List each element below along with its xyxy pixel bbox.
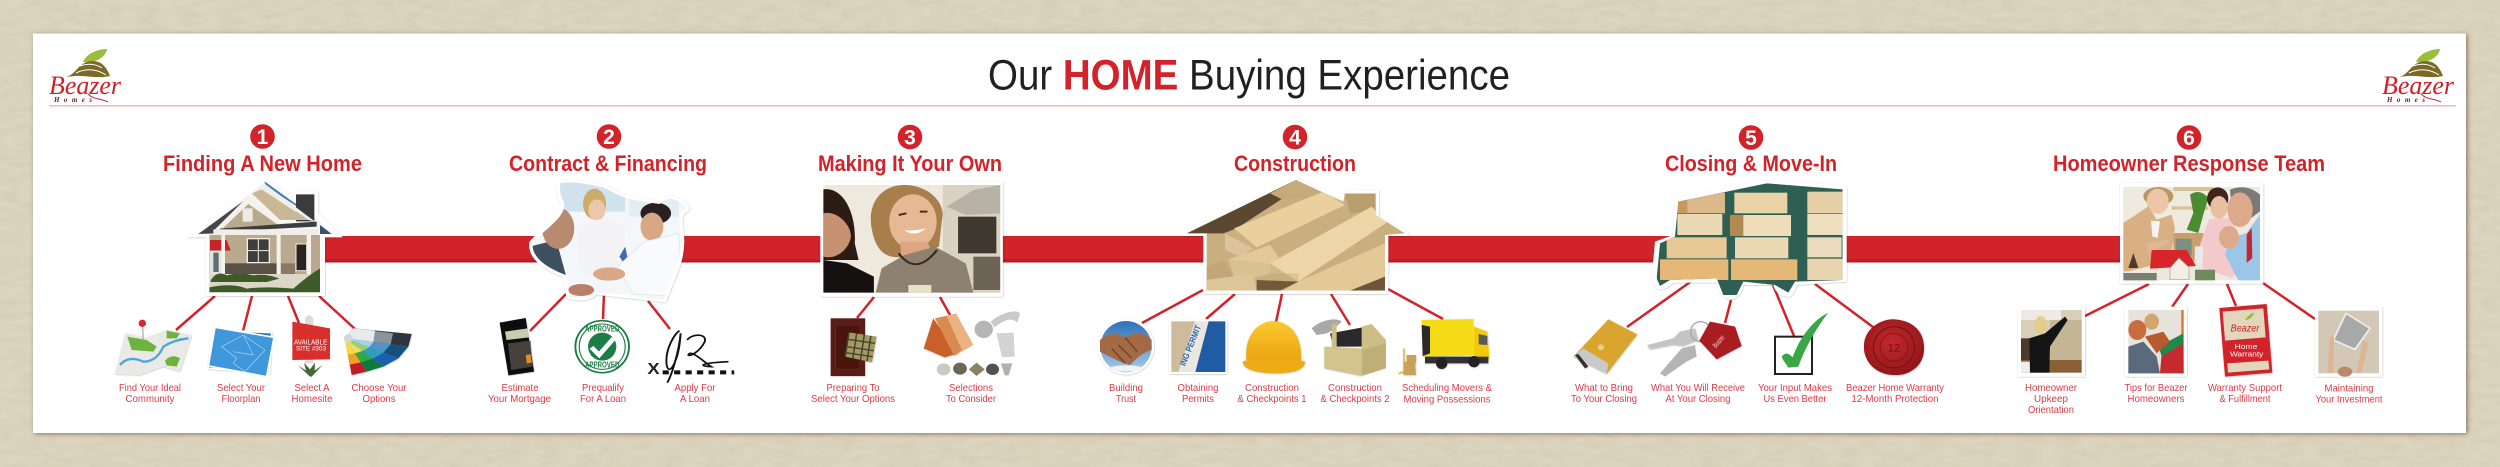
icon: wax seal warranty [1864, 319, 1924, 375]
label: Construction & Checkpoints 2: & Checkpoints 2 [1320, 393, 1390, 405]
label: What You Will Receive At Your Closing: What You Will Receive [1651, 382, 1745, 394]
label: Homeowner Upkeep Orientation [2025, 382, 2077, 416]
icon: homesite sign: SITE #303 [296, 346, 326, 353]
photo: house [187, 177, 343, 296]
label: Select A Homesite [292, 382, 333, 405]
logo: right Beazer Homes: Beazer [2382, 70, 2455, 100]
icon: home warranty booklet: Home [2235, 342, 2257, 351]
label: Your Input Makes Us Even Better: Us Even Better [1764, 393, 1827, 405]
heading: Closing & Move-In: Closing & Move-In [1665, 151, 1837, 176]
photo: tips for homeowners [2125, 307, 2187, 377]
icon: calculator [500, 318, 534, 375]
label: Scheduling Movers & Moving Possessions: Scheduling Movers & [1402, 382, 1492, 394]
icon: toolbox [1312, 319, 1386, 376]
label: Apply For A Loan: Apply For [674, 382, 716, 394]
connector lines [530, 293, 670, 331]
label: Scheduling Movers & Moving Possessions: Moving Possessions [1404, 394, 1490, 406]
label: Find Your Ideal Community [119, 382, 181, 405]
label: Building Trust: Trust [1116, 393, 1136, 405]
photo: homeowners with model house [2120, 183, 2263, 284]
icon: approved stamp: APPROVED [585, 324, 619, 334]
label: Your Input Makes Us Even Better [1758, 382, 1832, 405]
label: What to Bring To Your Closing [1571, 382, 1637, 405]
label: Beazer Home Warranty 12-Month Protection [1846, 382, 1945, 405]
step number 3 [898, 125, 922, 150]
step number 2: 2 [603, 126, 615, 149]
label: Construction & Checkpoints 2: Construction [1328, 382, 1382, 394]
heading: Finding A New Home: Finding A New Home [163, 151, 362, 176]
icon: home warranty booklet: Beazer [2231, 324, 2260, 335]
label: Warranty Support & Fulfillment: & Fulfillment [2220, 393, 2271, 405]
logo: right Beazer Homes [2382, 49, 2455, 104]
icon: homesite sign: AVAILABLE [294, 340, 328, 347]
icon: building permit [1169, 319, 1227, 374]
step number 6 [2177, 125, 2201, 150]
label: Select Your Floorplan: Select Your [217, 382, 265, 394]
icon: house keys with tag: Beazer [1711, 333, 1727, 350]
label: Choose Your Options: Options [362, 393, 396, 405]
icon: approved stamp [575, 321, 629, 373]
logo: right Beazer Homes: Homes [2386, 96, 2425, 104]
step number 5 [1739, 125, 1763, 150]
step number 4 [1283, 125, 1307, 150]
label: Apply For A Loan [674, 382, 716, 405]
step number 1: 1 [257, 126, 269, 149]
heading: Contract & Financing: Contract & Financing [509, 151, 707, 176]
logo: left Beazer Homes: Homes [53, 96, 92, 104]
icon: building permit: ING PERMIT [1178, 323, 1203, 367]
icon: house keys with tag [1647, 322, 1742, 377]
photo: maintaining your investment [2315, 307, 2382, 377]
panel: step 2 Contract & Financing [488, 124, 734, 405]
label: Warranty Support & Fulfillment [2208, 382, 2282, 405]
photo: lumber in house shape [1183, 177, 1410, 294]
logo: left Beazer Homes: Beazer [49, 70, 122, 100]
label: Your Input Makes Us Even Better: Your Input Makes [1758, 382, 1832, 394]
label: Select Your Floorplan: Floorplan [222, 393, 261, 405]
icon: home warranty booklet: Warranty [2230, 350, 2264, 359]
label: Estimate Your Mortgage [488, 382, 551, 405]
icon: moving truck [1398, 319, 1489, 375]
connector lines [1627, 280, 1877, 336]
label: Beazer Home Warranty 12-Month Protection: Beazer Home Warranty [1846, 382, 1945, 394]
connector lines [1142, 289, 1443, 325]
step number 4: 4 [1289, 126, 1301, 150]
label: Tips for Beazer Homeowners: Tips for Beazer [2124, 382, 2188, 394]
label: Beazer Home Warranty 12-Month Protection: 12-Month Protection [1852, 393, 1939, 405]
label: Find Your Ideal Community: Find Your Ideal [119, 382, 181, 394]
label: Tips for Beazer Homeowners: Homeowners [2128, 393, 2184, 405]
timeline bar [320, 236, 2125, 262]
label: What to Bring To Your Closing: To Your Closing [1571, 393, 1637, 405]
label: What You Will Receive At Your Closing [1651, 382, 1745, 405]
photo: two women at design studio [820, 182, 1003, 297]
label: Apply For A Loan: A Loan [680, 393, 710, 405]
icon: wood samples and fixtures [924, 311, 1020, 376]
label: Homeowner Upkeep Orientation: Upkeep [2034, 393, 2068, 405]
icon: wax seal warranty: 12 [1888, 343, 1900, 355]
label: What to Bring To Your Closing: What to Bring [1575, 382, 1633, 394]
icon: map with pin [115, 320, 192, 375]
label: Maintaining Your Investment [2316, 382, 2383, 406]
label: Maintaining Your Investment: Maintaining [2324, 382, 2374, 394]
icon: closing envelope [1573, 319, 1637, 374]
label: Selections To Consider: Selections [949, 382, 993, 394]
panel: step 3 Making It Your Own [811, 125, 1020, 405]
label: Estimate Your Mortgage: Your Mortgage [488, 393, 551, 405]
label: Selections To Consider: To Consider [946, 393, 996, 405]
label: Construction & Checkpoints 1 [1238, 382, 1307, 405]
heading: Construction: Construction [1234, 151, 1356, 176]
label: Homeowner Upkeep Orientation: Homeowner [2025, 382, 2077, 394]
icon: signature line: X [647, 359, 660, 378]
icon: colour fan deck [344, 328, 412, 375]
connector lines [176, 296, 355, 331]
label: Find Your Ideal Community: Community [126, 393, 175, 405]
panel: step 4 Construction [1098, 125, 1492, 405]
label: Building Trust: Building [1109, 382, 1143, 394]
icon: approved stamp: APPROVED [585, 360, 619, 370]
header rule [49, 105, 2456, 107]
step number 6: 6 [2183, 127, 2195, 150]
icon: checkbox with green tick [1775, 313, 1828, 374]
label: Maintaining Your Investment: Your Investment [2316, 394, 2383, 406]
step number 1 [250, 124, 275, 149]
icon: handshake [1098, 319, 1154, 375]
heading: Homeowner Response Team: Homeowner Response Team [2053, 151, 2325, 176]
icon: hard hat [1243, 321, 1305, 373]
heading: Making It Your Own: Making It Your Own [818, 151, 1002, 176]
title: Our HOME Buying Experience [988, 52, 1510, 100]
label: Obtaining Permits: Permits [1182, 393, 1214, 405]
icon: signature line [647, 331, 734, 383]
label: Choose Your Options [352, 382, 407, 405]
label: Preparing To Select Your Options: Preparing To [826, 382, 880, 394]
label: Scheduling Movers & Moving Possessions [1402, 382, 1492, 406]
label: What You Will Receive At Your Closing: At Your Closing [1666, 393, 1731, 405]
label: Prequalify For A Loan [580, 382, 626, 405]
logo: left Beazer Homes [49, 49, 122, 104]
label: Warranty Support & Fulfillment: Warranty Support [2208, 382, 2282, 394]
label: Select A Homesite: Homesite [292, 393, 333, 405]
label: Prequalify For A Loan: For A Loan [580, 393, 626, 405]
label: Preparing To Select Your Options [811, 382, 895, 405]
label: Building Trust [1109, 382, 1143, 405]
label: Obtaining Permits [1178, 382, 1219, 405]
label: Construction & Checkpoints 1: Construction [1245, 382, 1299, 394]
step number 3: 3 [904, 126, 916, 150]
label: Select A Homesite: Select A [294, 382, 330, 394]
icon: blueprint [208, 327, 274, 377]
icon: homesite sign [292, 315, 330, 377]
photo: couple with advisor [529, 180, 690, 300]
label: Prequalify For A Loan: Prequalify [582, 382, 625, 394]
icon: home warranty booklet [2219, 304, 2272, 377]
label: Homeowner Upkeep Orientation: Orientation [2028, 404, 2074, 416]
connector lines [857, 297, 950, 318]
label: Choose Your Options: Choose Your [352, 382, 407, 394]
photo: truck of moving boxes [1652, 179, 1847, 299]
photo: upkeep orientation [2018, 307, 2085, 377]
label: Tips for Beazer Homeowners [2124, 382, 2188, 405]
label: Estimate Your Mortgage: Estimate [502, 382, 539, 394]
panel: step 5 Closing & Move-In [1571, 125, 1945, 405]
step number 5: 5 [1745, 127, 1757, 150]
label: Select Your Floorplan [217, 382, 265, 405]
panel: step 6 Homeowner Response Team [2018, 125, 2383, 416]
icon: cabinet door and tile swatch [831, 318, 877, 376]
connector lines [2085, 283, 2315, 319]
panel: step 1 Finding A New Home [115, 124, 412, 405]
label: Construction & Checkpoints 2 [1320, 382, 1390, 405]
label: Obtaining Permits: Obtaining [1178, 382, 1219, 394]
step number 2 [597, 124, 621, 149]
label: Selections To Consider [946, 382, 996, 405]
label: Construction & Checkpoints 1: & Checkpoints 1 [1238, 393, 1307, 405]
label: Preparing To Select Your Options: Select Your Options [811, 393, 895, 405]
